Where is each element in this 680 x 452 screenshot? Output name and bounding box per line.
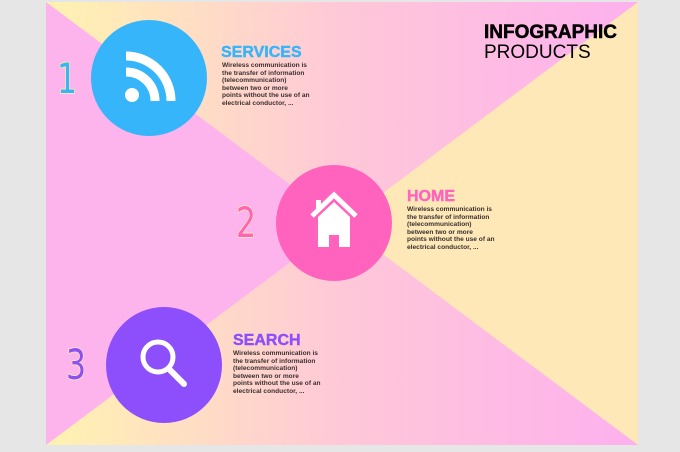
- home text: the transfer of information: [407, 214, 489, 220]
- circle: home icon: [276, 165, 392, 281]
- title: INFOGRAPHIC: [484, 22, 617, 43]
- title: [484, 22, 617, 63]
- services text: [222, 62, 310, 106]
- search text: Wireless communication is: [233, 350, 318, 357]
- home text: between two or more: [407, 228, 473, 236]
- search text: the transfer of information: [233, 358, 315, 364]
- search text: [233, 350, 321, 394]
- services text: electrical conductor, ...: [222, 100, 293, 106]
- search heading: SEARCH: [233, 332, 301, 349]
- circle: search icon: [106, 307, 222, 423]
- search text: points without the use of an: [233, 380, 321, 387]
- services text: the transfer of information: [222, 70, 304, 76]
- title: PRODUCTS: [484, 42, 591, 63]
- home heading: HOME: [407, 188, 455, 205]
- services text: Wireless communication is: [222, 62, 307, 69]
- home text: Wireless communication is: [407, 206, 492, 213]
- home text: (telecommunication): [407, 221, 471, 228]
- home text: electrical conductor, ...: [407, 244, 478, 250]
- services heading: SERVICES: [221, 44, 302, 61]
- number 3: 3: [66, 340, 86, 389]
- services text: points without the use of an: [222, 92, 310, 99]
- number 1: 1: [57, 54, 77, 103]
- services text: between two or more: [222, 84, 288, 92]
- home text: points without the use of an: [407, 236, 495, 243]
- search text: (telecommunication): [233, 365, 297, 372]
- number 2: 2: [236, 198, 256, 247]
- home text: [407, 206, 495, 250]
- services text: (telecommunication): [222, 77, 286, 84]
- search text: between two or more: [233, 372, 299, 380]
- search text: electrical conductor, ...: [233, 388, 304, 394]
- circle: services icon: [91, 20, 207, 136]
